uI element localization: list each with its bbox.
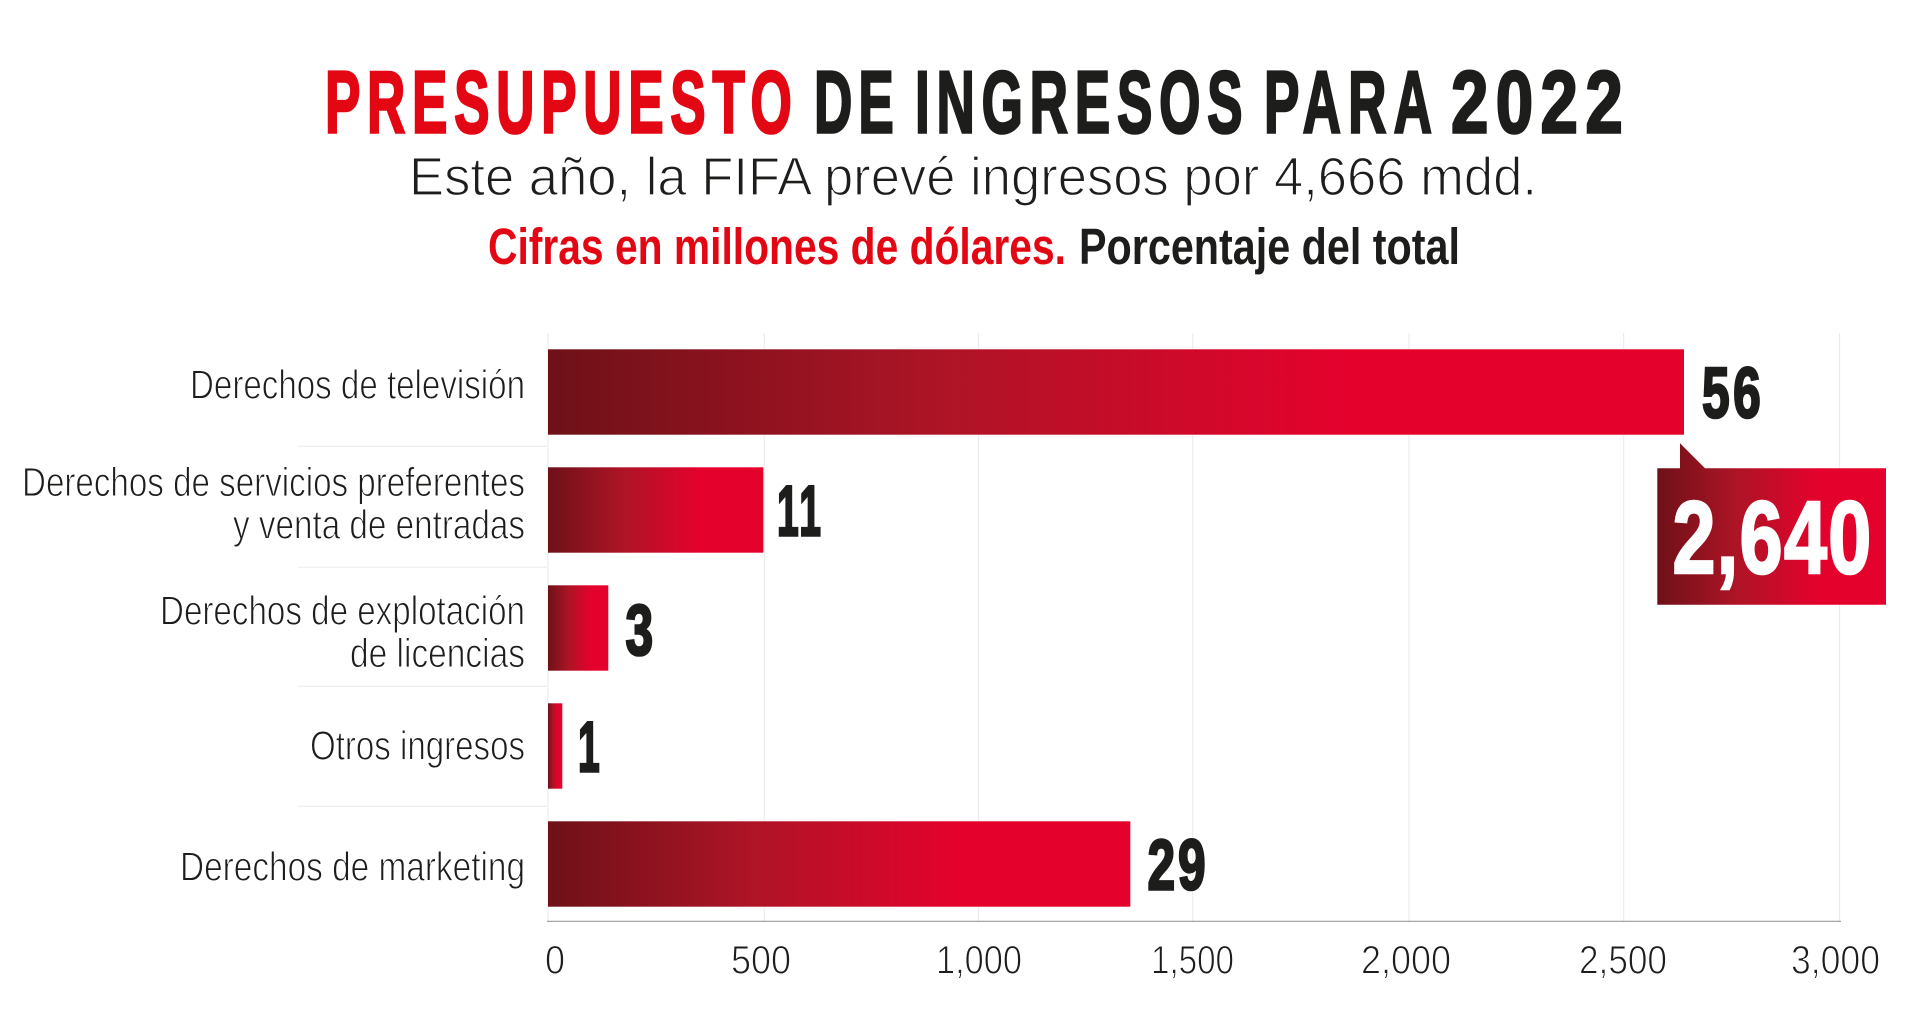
category label: Derechos de explotación de licencias: Derechos de explotación [160,588,525,634]
category label: Derechos de explotación de licencias [160,588,525,676]
title: 2022 [1451,53,1623,152]
category label: Derechos de servicios preferentes y venta de entradas: y venta de entradas [233,501,525,547]
x axis tick labels: 0 [545,938,565,982]
percentage value: 56: 56 [1702,354,1761,433]
bar: Derechos de televisión [548,349,1684,435]
category label: Derechos de servicios preferentes y venta de entradas: Derechos de servicios preferentes [22,459,525,505]
title: PARA [1264,54,1432,152]
bar: Derechos de explotación de licencias [548,585,608,671]
percentage value: 29: 29 [1148,826,1206,905]
callout value: 2,640 [1672,481,1871,596]
category label: Derechos de marketing: Derechos de marketing [180,843,525,889]
bar: Derechos de marketing [548,821,1130,907]
title: PRESUPUESTO [325,54,792,152]
bar chart [22,333,1880,982]
bar: Otros ingresos [548,703,562,789]
category label: Otros ingresos: Otros ingresos [310,722,525,768]
title [325,53,1623,152]
x axis tick labels: 1,500 [1151,938,1234,982]
title: DE [814,54,894,152]
percentage value: 11: 11 [777,472,821,552]
percentage value: 3: 3 [626,591,653,670]
units note: Cifras en millones de dólares. [488,218,1066,275]
x axis line [547,920,1841,922]
x axis tick labels: 3,000 [1791,938,1880,982]
row separators [298,446,547,806]
category label: Derechos de servicios preferentes y venta de entradas [22,459,525,547]
callout box with pointer [1657,443,1886,605]
callout: television value [1657,443,1886,605]
x axis tick labels: 1,000 [936,938,1022,982]
units note: Porcentaje del total [1079,218,1460,275]
x axis tick labels: 2,000 [1361,938,1451,982]
category label: Derechos de televisión: Derechos de televisión [190,361,525,407]
gridlines [548,333,1840,922]
x axis tick labels: 500 [731,938,791,982]
subtitle: Este año, la FIFA prevé ingresos por 4,666 mdd. [409,147,1537,207]
bar: Derechos de servicios preferentes [548,467,763,553]
category label: Derechos de explotación de licencias: de licencias [350,630,525,676]
x axis tick labels [545,938,1880,982]
x axis tick labels: 2,500 [1579,938,1667,982]
percentage value: 1: 1 [578,708,600,788]
title: INGRESOS [915,54,1243,152]
